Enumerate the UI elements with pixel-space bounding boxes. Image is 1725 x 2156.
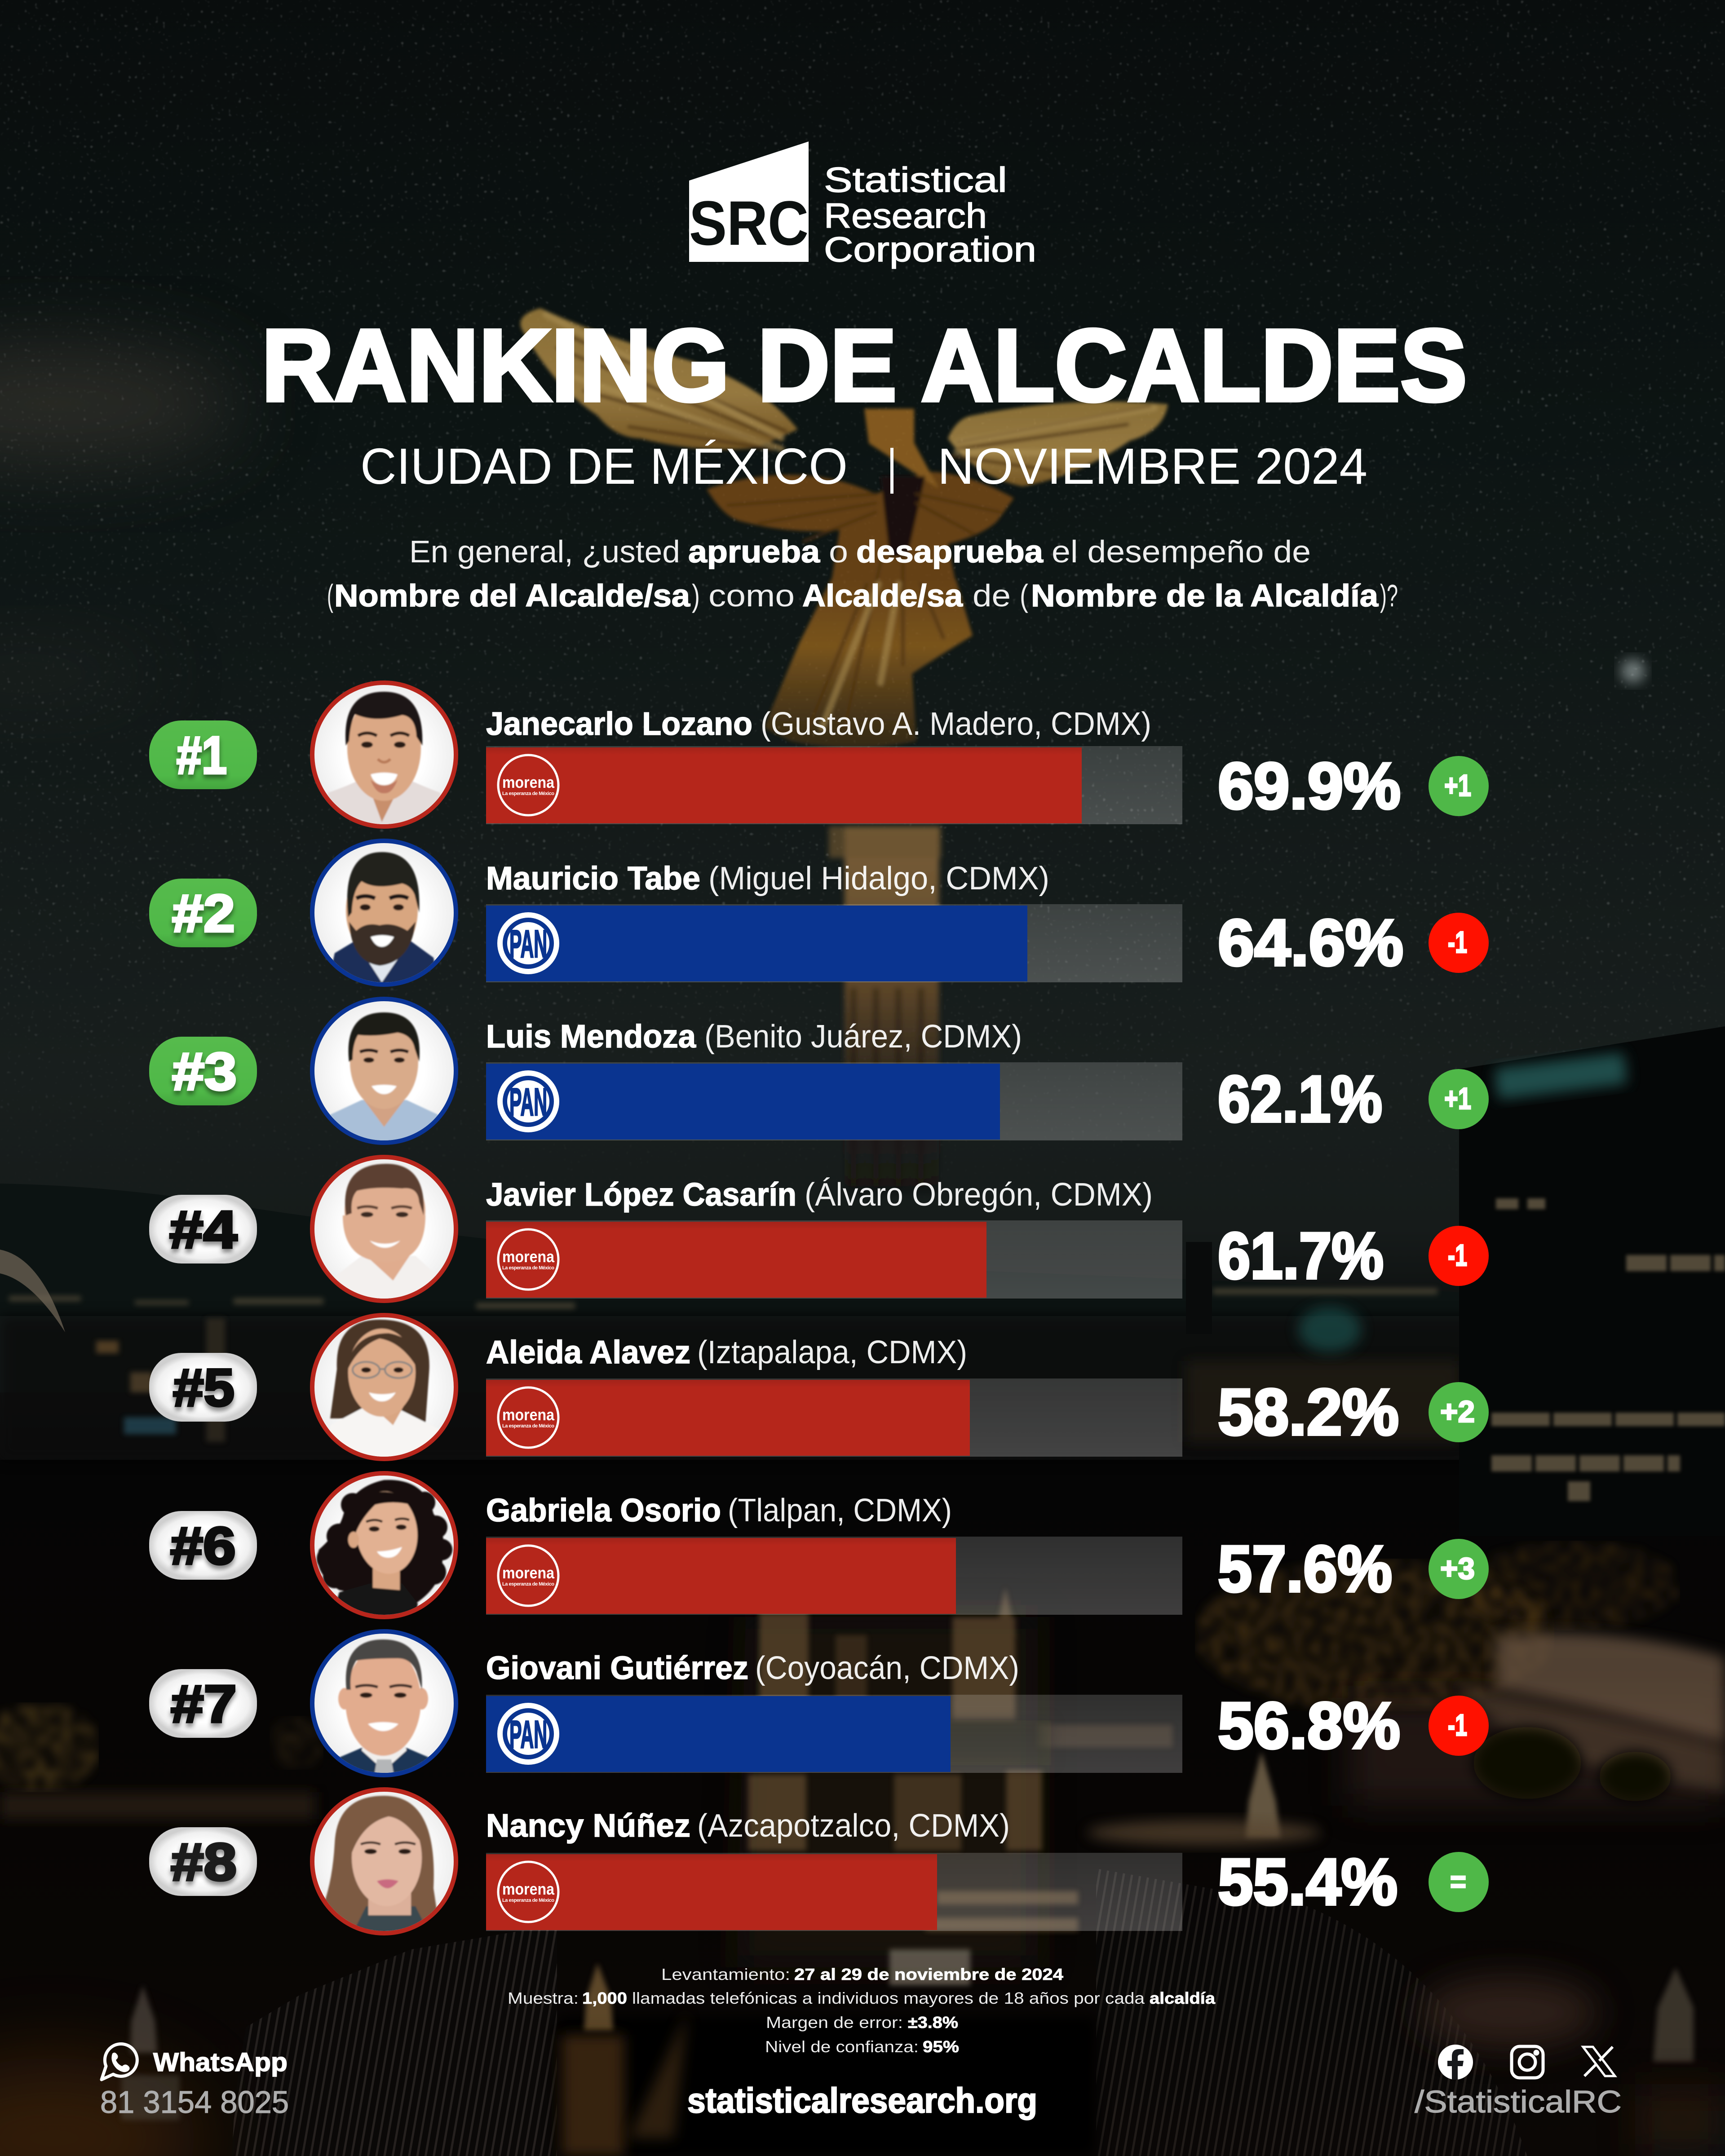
- monument base: [737, 1587, 1172, 1985]
- party logo: morena: [498, 755, 558, 815]
- name and alcaldía: (Iztapalapa, CDMX): [697, 1334, 967, 1370]
- survey methodology notes: ±3.8%: [908, 2013, 958, 2032]
- row 8: Nancy Núñez: [149, 1789, 1489, 1933]
- approval value: 57.6%: [1218, 1532, 1392, 1605]
- portrait: Javier López Casarín: [312, 1157, 456, 1301]
- candles and warm glows: [0, 1752, 1725, 2156]
- party logo: morena: [498, 1387, 558, 1448]
- party logo: morena: [498, 1862, 558, 1922]
- rank change badge: +1: [1444, 769, 1471, 803]
- name and alcaldía: (Benito Juárez, CDMX): [704, 1019, 1022, 1055]
- party logo: PAN: [497, 912, 559, 974]
- whatsapp contact: [100, 2044, 289, 2120]
- name and alcaldía: (Azcapotzalco, CDMX): [697, 1808, 1010, 1844]
- row 1: Janecarlo Lozano: [149, 683, 1489, 826]
- party logo: morena: La esperanza de México: [502, 1582, 554, 1587]
- row 2: Mauricio Tabe: [149, 841, 1489, 985]
- survey methodology notes: Levantamiento:: [661, 1965, 790, 1984]
- rank change badge: +1: [1444, 1082, 1471, 1116]
- survey methodology notes: alcaldía: [1150, 1989, 1216, 2007]
- name and alcaldía: [486, 861, 1049, 897]
- survey question: ): [692, 578, 700, 613]
- rank change badge: [1429, 913, 1489, 973]
- portrait: Mauricio Tabe: [312, 841, 456, 985]
- rank badge #4: [149, 1195, 257, 1264]
- approval bar: [486, 1853, 1182, 1931]
- logo wordmark: Statistical: [824, 160, 1007, 199]
- approval bar: [486, 746, 1182, 824]
- approval value: 62.1%: [1218, 1062, 1382, 1135]
- name and alcaldía: Javier López Casarín: [486, 1177, 796, 1213]
- party logo: morena: La esperanza de México: [502, 1423, 554, 1429]
- rank change badge: [1429, 1226, 1489, 1286]
- rank change badge: [1429, 756, 1489, 816]
- rank change badge: [1429, 1696, 1489, 1756]
- mountains and skyline: [0, 1184, 1482, 1460]
- rank badge #5: #5: [173, 1358, 234, 1418]
- rank change badge: [1429, 1382, 1489, 1442]
- party logo: morena: morena: [502, 1405, 555, 1424]
- name and alcaldía: Giovani Gutiérrez: [486, 1650, 748, 1686]
- row 4: Javier López Casarín: [149, 1157, 1489, 1301]
- name and alcaldía: [486, 1650, 1019, 1686]
- party logo: PAN: PAN: [509, 923, 547, 966]
- rank badge #8: [149, 1827, 257, 1896]
- rank badge #2: [149, 879, 257, 947]
- rank change badge: =: [1450, 1864, 1466, 1899]
- rank change badge: +2: [1440, 1395, 1475, 1429]
- whatsapp label: WhatsApp: [153, 2048, 288, 2077]
- rank badge #8: #8: [171, 1833, 237, 1892]
- approval bar: [486, 1062, 1182, 1140]
- rank change badge: -1: [1448, 1238, 1467, 1272]
- logo wordmark: [824, 160, 1036, 269]
- approval value: 55.4%: [1218, 1845, 1398, 1918]
- survey question: de: [973, 578, 1011, 613]
- icon: facebook: [1438, 2045, 1473, 2080]
- approval bar: [486, 904, 1182, 982]
- logo wordmark: Research: [824, 196, 987, 235]
- survey question: como: [708, 578, 795, 613]
- party logo: morena: [498, 1546, 558, 1606]
- party logo: morena: morena: [502, 1247, 555, 1266]
- survey methodology notes: llamadas telefónicas a individuos mayores de 18 años por cada: [632, 1989, 1145, 2007]
- row 5: Aleida Alavez: [149, 1315, 1489, 1459]
- name and alcaldía: Nancy Núñez: [486, 1808, 690, 1844]
- portrait: Giovani Gutiérrez: [312, 1631, 456, 1775]
- approval bar: [486, 1537, 1182, 1615]
- survey methodology notes: 27 al 29 de noviembre de 2024: [794, 1965, 1063, 1984]
- striped dome roofs: [232, 1869, 1527, 2156]
- subtitle: NOVIEMBRE 2024: [938, 438, 1367, 495]
- survey methodology notes: Margen de error:: [766, 2013, 903, 2032]
- subtitle: CIUDAD DE MÉXICO: [360, 438, 848, 495]
- rank badge #4: #4: [169, 1200, 237, 1259]
- survey question: aprueba: [688, 534, 820, 569]
- rank badge #6: #6: [170, 1516, 236, 1576]
- phone number: 81 3154 8025: [100, 2085, 289, 2120]
- approval bar: [486, 1695, 1182, 1773]
- name and alcaldía: Janecarlo Lozano: [486, 706, 752, 742]
- survey question: el desempeño de: [1052, 534, 1311, 569]
- rank change badge: -1: [1448, 1708, 1467, 1742]
- row 6: Gabriela Osorio: [149, 1473, 1489, 1617]
- name and alcaldía: (Gustavo A. Madero, CDMX): [761, 706, 1151, 742]
- name and alcaldía: [486, 1493, 952, 1529]
- rank badge #5: [149, 1353, 257, 1422]
- logo mark: house shape with SRC: [689, 141, 809, 262]
- SRC logo: [689, 141, 1036, 269]
- party logo: PAN: PAN: [509, 1081, 547, 1124]
- portrait: Aleida Alavez: [312, 1315, 456, 1459]
- survey methodology notes: Nivel de confianza:: [765, 2037, 919, 2056]
- survey question: En general, ¿usted: [409, 534, 680, 569]
- social handles: [1415, 2045, 1622, 2119]
- name and alcaldía: (Miguel Hidalgo, CDMX): [708, 861, 1049, 897]
- rank badge #3: #3: [172, 1042, 237, 1101]
- portrait: Janecarlo Lozano: [312, 683, 456, 826]
- approval bar: [486, 1378, 1182, 1457]
- subtitle: [360, 438, 1367, 495]
- party logo: PAN: PAN: [509, 1713, 547, 1756]
- party logo: PAN: [497, 1703, 559, 1765]
- rank change badge: [1429, 1069, 1489, 1129]
- name and alcaldía: [486, 1177, 1153, 1213]
- survey question: Alcalde/sa: [802, 578, 963, 613]
- rank badge #3: [149, 1037, 257, 1105]
- column: [829, 826, 941, 1195]
- rank badge #7: #7: [171, 1674, 237, 1734]
- row 7: Giovani Gutiérrez: [149, 1631, 1489, 1775]
- portrait: Nancy Núñez: [312, 1789, 456, 1933]
- name and alcaldía: Luis Mendoza: [486, 1019, 696, 1055]
- approval value: 69.9%: [1218, 749, 1401, 822]
- survey question: [327, 534, 1398, 613]
- name and alcaldía: (Coyoacán, CDMX): [755, 1650, 1019, 1686]
- name and alcaldía: (Tlalpan, CDMX): [728, 1493, 952, 1529]
- name and alcaldía: Aleida Alavez: [486, 1334, 690, 1370]
- name and alcaldía: [486, 1019, 1022, 1055]
- name and alcaldía: (Álvaro Obregón, CDMX): [805, 1177, 1153, 1213]
- rank change badge: [1429, 1852, 1489, 1912]
- icon: X: [1583, 2047, 1615, 2076]
- rank change badge: [1429, 1539, 1489, 1599]
- logo wordmark: Corporation: [824, 230, 1036, 269]
- approval value: 58.2%: [1218, 1375, 1399, 1449]
- right office building: [1186, 1026, 1725, 1536]
- rank badge #7: [149, 1669, 257, 1738]
- party logo: morena: [498, 1229, 558, 1290]
- rank badge #2: #2: [172, 884, 235, 943]
- survey question: Nombre del Alcalde/sa: [334, 578, 690, 613]
- name and alcaldía: [486, 1334, 967, 1370]
- survey methodology notes: Muestra:: [508, 1989, 579, 2007]
- icon: instagram: [1512, 2046, 1543, 2078]
- party logo: morena: La esperanza de México: [502, 791, 554, 796]
- survey question: (: [1020, 578, 1028, 613]
- approval bar: [486, 1220, 1182, 1299]
- name and alcaldía: [486, 1808, 1010, 1844]
- party logo: PAN: [497, 1070, 559, 1132]
- name and alcaldía: [486, 706, 1151, 742]
- approval value: 61.7%: [1218, 1219, 1384, 1292]
- rank badge #6: [149, 1511, 257, 1580]
- party logo: morena: morena: [502, 773, 555, 791]
- name and alcaldía: Gabriela Osorio: [486, 1493, 721, 1529]
- logo mark: house shape with SRC: SRC: [689, 188, 809, 258]
- party logo: morena: morena: [502, 1564, 555, 1582]
- row 3: Luis Mendoza: [149, 999, 1489, 1143]
- approval value: 64.6%: [1218, 906, 1403, 979]
- survey methodology notes: [508, 1965, 1216, 2056]
- social handle: /StatisticalRC: [1415, 2084, 1622, 2119]
- party logo: morena: La esperanza de México: [502, 1265, 554, 1271]
- rank change badge: +3: [1440, 1551, 1475, 1586]
- survey methodology notes: 95%: [923, 2037, 959, 2056]
- name and alcaldía: Mauricio Tabe: [486, 861, 700, 897]
- rank change badge: -1: [1448, 925, 1467, 959]
- party logo: morena: morena: [502, 1880, 555, 1898]
- survey question: desaprueba: [856, 534, 1044, 569]
- approval value: 56.8%: [1218, 1689, 1400, 1762]
- rank badge #1: [149, 720, 257, 789]
- rank badge #1: #1: [177, 726, 227, 785]
- portrait: Gabriela Osorio: [312, 1473, 456, 1617]
- trees and lit ground: [0, 1541, 1725, 1819]
- party logo: morena: La esperanza de México: [502, 1898, 554, 1903]
- survey question: )?: [1380, 578, 1398, 613]
- icon: whatsapp: [102, 2044, 137, 2080]
- portrait: Luis Mendoza: [312, 999, 456, 1143]
- survey methodology notes: 1,000: [582, 1989, 627, 2007]
- survey question: (: [327, 578, 333, 613]
- gold winged angel: [520, 308, 1168, 748]
- website: statisticalresearch.org: [687, 2081, 1037, 2120]
- title: RANKING DE ALCALDES: [261, 309, 1467, 423]
- survey question: Nombre de la Alcaldía: [1031, 578, 1379, 613]
- survey question: o: [829, 534, 848, 569]
